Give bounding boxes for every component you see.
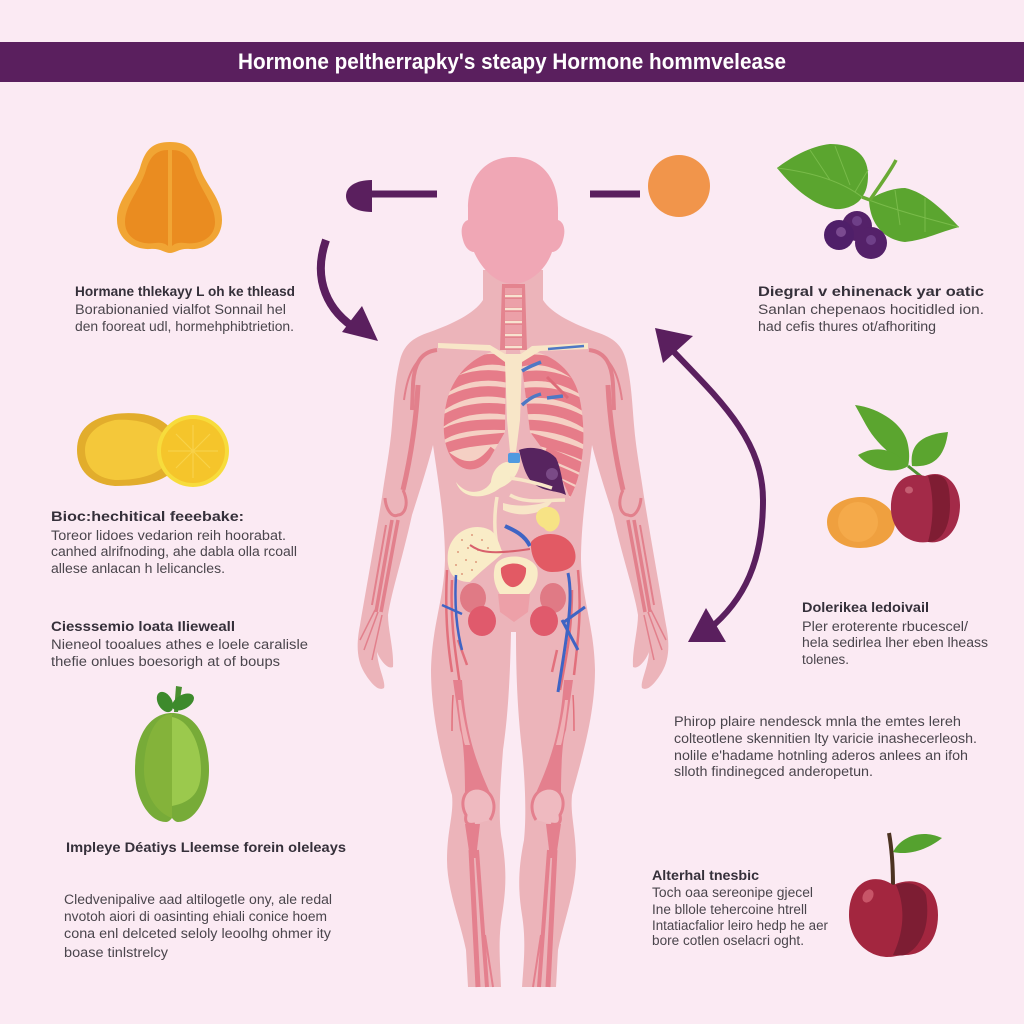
text block: ciesssemio: [51, 618, 308, 669]
text block: biochemical feedback: Toreor lidoes vedarion reih hoorabat.: [51, 528, 286, 543]
liver: [519, 448, 566, 495]
text block: hormane: Hormane thlekayy L oh ke thleasd: [75, 283, 295, 299]
text block: dolerikea: Pler eroterente rbucescel/: [802, 619, 968, 634]
icon: cherry apple: [849, 833, 942, 957]
text block: impleye heading: Impleye Déatiys Lleemse forein oleleays: [66, 839, 346, 855]
spine neck: [500, 284, 527, 350]
text block: biochemical feedback: [51, 508, 297, 576]
body silhouette: [358, 270, 668, 987]
title banner: [0, 42, 1024, 82]
lower uterus: [498, 594, 530, 622]
blue duct: [505, 526, 530, 546]
text block: diegral: had cefis thures ot/afhoriting: [758, 319, 936, 334]
arrow: curved left: [321, 240, 378, 341]
left arm bones: [360, 350, 437, 660]
left rib cage: [444, 350, 506, 470]
icon: orange circle: [648, 155, 710, 217]
text block: biochemical feedback: canhed alrifnoding, ahe dabla olla rcoall: [51, 544, 297, 559]
left leg bones: [452, 680, 494, 987]
text block: alterhal: Ine bllole tehercoine htrell: [652, 902, 807, 917]
uterus red: [501, 564, 526, 587]
arrow: long double-headed curve: [655, 328, 763, 642]
text block: ciesssemio: Ciesssemio loata Ilieweall: [51, 618, 235, 634]
text block: dolerikea: hela sedirlea lher eben lheass: [802, 635, 988, 650]
text block: diegral: [758, 283, 984, 334]
head: [462, 157, 564, 284]
text block: hormane: den fooreat udl, hormehphibtrietion.: [75, 319, 294, 334]
gland blue: [508, 453, 520, 463]
collarbones and sternum: [438, 343, 588, 452]
pelvic organs: [460, 583, 566, 636]
text block: biochemical feedback: Bioc:hechitical feeebake:: [51, 508, 244, 524]
cream band: [503, 500, 553, 514]
text block: cledvenipalive: nvotoh aiori di oasinting ehiali conice hoem: [64, 909, 327, 924]
yellow gland: [536, 507, 560, 531]
text block: alterhal: Alterhal tnesbic: [652, 867, 759, 883]
text block: diegral: Diegral v ehinenack yar oatic: [758, 283, 984, 299]
right arm bones: [589, 350, 666, 660]
human body figure: [358, 157, 668, 987]
right leg bones: [532, 680, 574, 987]
text block: phirop: slloth findinegced anderopetun.: [674, 764, 873, 779]
icon: blueberries with leaves: [777, 144, 959, 259]
title banner: Hormone peltherrapky's steapy Hormone hommvelease: [238, 49, 786, 74]
stomach tube: [456, 462, 520, 496]
text block: hormane: [75, 283, 295, 334]
text block: alterhal: Toch oaa sereonipe gjecel: [652, 885, 813, 900]
text block: cledvenipalive: cona enl delceted seloly leoolhg ohmer ity: [64, 926, 331, 941]
pelvis: [494, 556, 538, 597]
text block: hormane: Borabionanied vialfot Sonnail hel: [75, 302, 286, 317]
icon: plum with leaves and peach: [827, 405, 960, 548]
text block: phirop: colteotlene skennitien lty varicie inashecerleosh.: [674, 731, 977, 746]
right rib cage: [520, 350, 584, 498]
intestine bands: [495, 478, 565, 545]
text block: phirop: [674, 714, 977, 779]
text block: dolerikea: Dolerikea ledoivail: [802, 599, 929, 615]
text block: cledvenipalive: boase tinlstrelcy: [64, 945, 168, 960]
text block: ciesssemio: Nieneol tooalues athes e loele caralisle: [51, 637, 308, 652]
blue vessels chest: [522, 346, 584, 405]
text block: dolerikea: [802, 599, 988, 667]
text block: alterhal: Intatiacfalior leiro hedp he aer: [652, 918, 828, 933]
icon: green guava: [135, 686, 209, 822]
text block: alterhal: bore cotlen oselacri oght.: [652, 933, 804, 948]
text block: alterhal: [652, 867, 828, 948]
icon: orange pear: [117, 142, 222, 253]
text block: dolerikea: tolenes.: [802, 652, 849, 667]
text block: biochemical feedback: allese anlacan h lelicancles.: [51, 561, 225, 576]
text block: cledvenipalive: [64, 892, 332, 960]
text block: phirop: Phirop plaire nendesck mnla the emtes lereh: [674, 714, 961, 729]
groin vessels: [446, 570, 580, 690]
text block: cledvenipalive: Cledvenipalive aad altilogetle ony, ale redal: [64, 892, 332, 907]
dotted organ: [448, 527, 530, 582]
text block: ciesssemio: thefie onlues boesorigh at of boups: [51, 654, 280, 669]
red organ: [531, 534, 576, 572]
arrow: line to orange circle: [590, 190, 640, 198]
blue leg veins: [442, 573, 585, 692]
red vessel chest: [547, 377, 568, 398]
arrow: left pointing: [346, 180, 437, 212]
text block: phirop: nolile e'hadame hotnling aderos anlees an ifoh: [674, 748, 968, 763]
text block: diegral: Sanlan chepenaos hocitidled ion.: [758, 302, 984, 317]
icon: yellow lemon: [77, 413, 229, 487]
